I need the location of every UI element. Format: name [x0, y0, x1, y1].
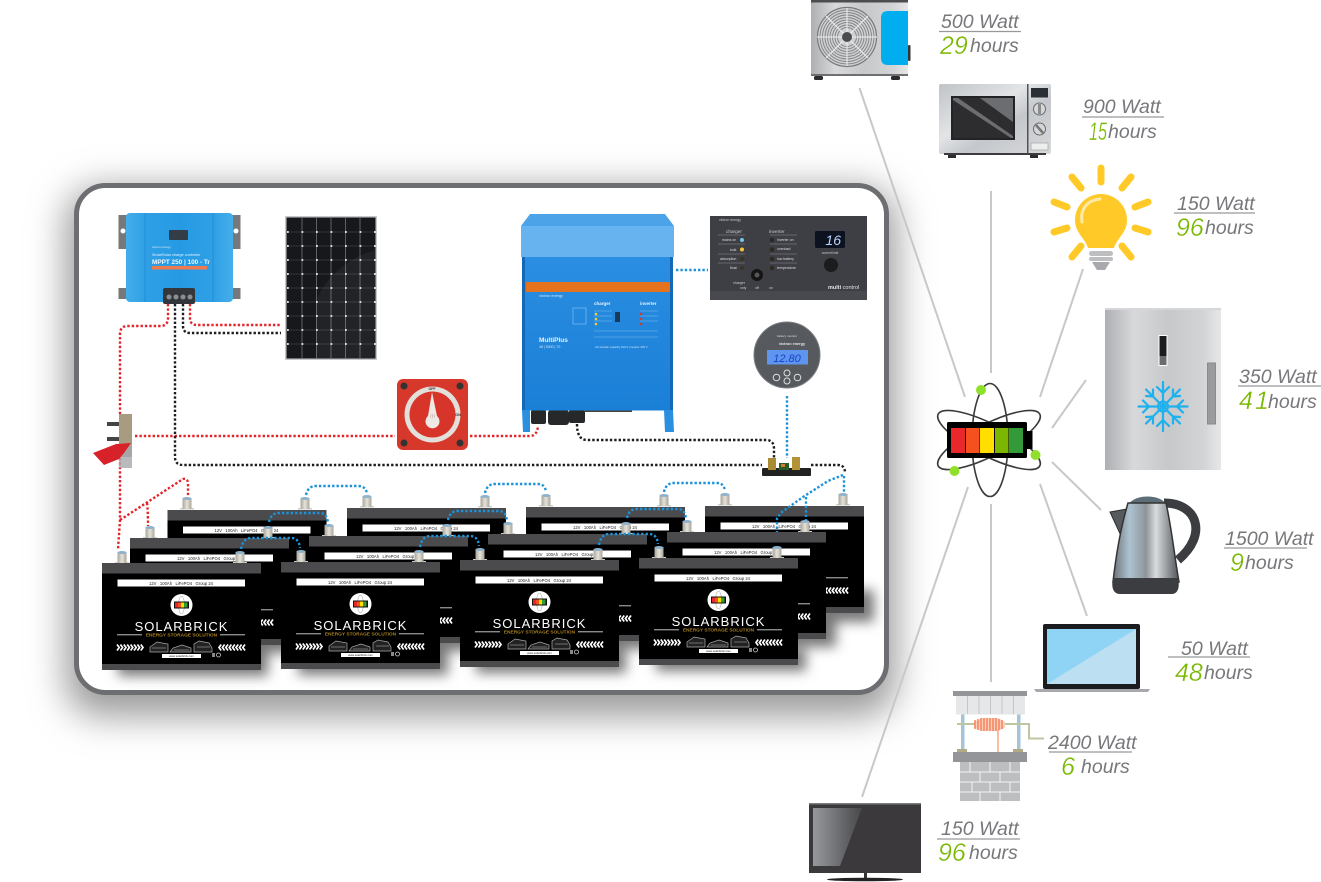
icon: multi control panel: absorption [720, 257, 736, 261]
battery: middle 2: 12V 100Ah LiFePO4 Group 24 [356, 554, 421, 559]
label: heat pump runtime: 29 [939, 32, 968, 60]
battery: middle 2 [309, 536, 468, 643]
label: microwave runtime: hours [1108, 121, 1157, 143]
battery: front 1: 12V 100Ah LiFePO4 Group 24 [149, 581, 214, 586]
icon: multi control panel: charger [726, 229, 742, 234]
label: microwave runtime: 15 [1089, 118, 1107, 146]
battery: front 3: www.solarbrick.com [527, 651, 553, 655]
icon: microwave [939, 84, 1051, 158]
panel: system wiring diagram [66, 186, 896, 716]
icon: MPPT solar charge controller: SmartSolar charge controller [152, 253, 201, 257]
wires: front row links [241, 534, 658, 549]
label: light bulb runtime: 150 Watt [1177, 193, 1256, 215]
battery: middle 4 [667, 532, 826, 639]
label: laptop runtime: hours [1204, 662, 1253, 684]
battery: front 2: ENERGY STORAGE SOLUTION [325, 632, 397, 638]
battery shadow [118, 590, 874, 676]
wires: middle row links [269, 509, 686, 523]
batteries: front row [102, 546, 798, 670]
icon: refrigerator [1105, 308, 1221, 470]
icon: electric kettle [1110, 496, 1196, 594]
label: water well pump runtime: 2400 Watt [1047, 732, 1138, 754]
battery: front 3: ENERGY STORAGE SOLUTION [504, 630, 576, 636]
label: light bulb runtime [1174, 193, 1256, 242]
battery: front 3: 12V 100Ah LiFePO4 Group 24 [507, 578, 572, 583]
battery: middle 1 [130, 538, 289, 645]
icon: MultiPlus inverter charger: AC transfer capacity 100 A | inverter 230 V [595, 345, 648, 349]
icon: MultiPlus inverter charger: 48 | 5000 | 70 [539, 345, 560, 349]
connector lines: hub to appliances [860, 88, 1101, 797]
icon: multi control panel: bulk [730, 248, 737, 252]
battery: front 2 [281, 562, 440, 669]
icon: battery monitor: victron energy [779, 342, 806, 346]
battery: front 4: ENERGY STORAGE SOLUTION [683, 628, 755, 634]
label: refrigerator runtime: 4 [1239, 387, 1253, 415]
label: television runtime [937, 818, 1020, 867]
icon: multi control panel: mains on [722, 238, 736, 242]
label: television runtime: 150 Watt [941, 818, 1020, 840]
icon: heat pump [811, 0, 910, 80]
icon: multi control panel: 16 [825, 232, 841, 248]
battery: back 4 [705, 506, 864, 613]
label: refrigerator runtime: hours [1268, 391, 1317, 413]
wires: blue data cables [676, 270, 787, 458]
icon: MultiPlus inverter charger: inverter [640, 301, 657, 306]
icon: television [809, 803, 921, 881]
battery: middle 1: 12V 100Ah LiFePO4 Group 24 [177, 556, 242, 561]
icon: MultiPlus inverter charger: charger [594, 301, 611, 306]
battery: front 1: www.solarbrick.com [169, 654, 195, 658]
batteries: middle row [130, 520, 826, 645]
wires: back row links and shunt links [306, 475, 844, 533]
label: light bulb runtime: hours [1205, 217, 1254, 239]
icon: MultiPlus inverter charger: MultiPlus [539, 337, 568, 344]
battery: front 1: ENERGY STORAGE SOLUTION [146, 632, 218, 638]
icon: multi control panel: temperature [777, 266, 796, 270]
icon: snowflake [1138, 382, 1188, 431]
label: kettle runtime: 1500 Watt [1225, 528, 1315, 550]
label: microwave runtime [1082, 96, 1164, 146]
batteries: back row [168, 493, 864, 617]
icon: multi control panel: multi control [828, 285, 859, 291]
icon: multi control panel [710, 216, 867, 300]
icon: battery isolator switch: m [430, 414, 435, 420]
label: refrigerator runtime: 1 [1255, 387, 1269, 415]
label: light bulb runtime: 96 [1176, 214, 1204, 242]
battery: middle 3: 12V 100Ah LiFePO4 Group 24 [535, 552, 600, 557]
icon: multi control panel: victron energy [719, 218, 741, 222]
battery: back 1 [168, 510, 326, 617]
icon: MPPT solar charge controller: victron energy [152, 245, 171, 249]
icon: multi control panel: on [769, 286, 773, 290]
icon: multi control panel: current limit [822, 251, 838, 255]
icon: solar panel [285, 216, 377, 360]
icon: battery monitor: battery monitor [777, 334, 797, 338]
label: laptop runtime: 50 Watt [1181, 638, 1249, 660]
label: microwave runtime: 900 Watt [1083, 96, 1162, 118]
label: kettle runtime: 9 [1230, 549, 1244, 577]
label: water well pump runtime [1047, 732, 1138, 781]
icon: battery isolator switch [397, 379, 468, 450]
label: laptop runtime [1168, 638, 1253, 687]
icon: battery isolator switch: ON [455, 413, 461, 417]
battery: back 3 [526, 507, 685, 614]
icon: water well [953, 691, 1044, 801]
icon: multi control panel: inverter [769, 229, 785, 234]
label: water well pump runtime: 6 [1061, 753, 1075, 781]
battery: middle 3 [488, 534, 647, 641]
battery: front 4 [639, 558, 798, 665]
battery: back 2: 12V 100Ah LiFePO4 Group 24 [394, 526, 459, 531]
label: laptop runtime: 48 [1175, 659, 1203, 687]
icon: multi control panel: charger [733, 281, 746, 285]
label: television runtime: 96 [938, 839, 966, 867]
icon: light bulb [1054, 168, 1148, 270]
icon: battery isolator switch: OFF [428, 387, 436, 391]
wires: black negative cables [175, 304, 845, 473]
label: heat pump runtime: hours [970, 35, 1019, 57]
battery: front 4: SOLARBRICK [672, 614, 765, 629]
battery: back 1: 12V 100Ah LiFePO4 Group 24 [214, 528, 279, 533]
battery: front 2: www.solarbrick.com [348, 653, 374, 657]
battery: front 4: 12V 100Ah LiFePO4 Group 24 [686, 576, 751, 581]
label: heat pump runtime: 500 Watt [941, 11, 1020, 33]
battery: back 4: 12V 100Ah LiFePO4 Group 24 [752, 524, 817, 529]
battery: back 2 [347, 508, 506, 615]
label: heat pump runtime [939, 11, 1021, 60]
label: water well pump runtime: hours [1081, 756, 1130, 778]
battery: back 3: 12V 100Ah LiFePO4 Group 24 [573, 525, 638, 530]
label: kettle runtime [1224, 528, 1315, 577]
battery: front 3 [460, 560, 619, 667]
icon: battery monitor: 12.80 [773, 353, 802, 365]
icon: battery monitor [754, 322, 820, 388]
icon: multi control panel: overload [777, 247, 790, 251]
icon: MPPT solar charge controller: MPPT 250 | 100 - Tr [152, 259, 210, 266]
wires: red positive cables [118, 304, 538, 549]
icon: multi control panel: inverter on [777, 238, 794, 242]
battery: front 1: SOLARBRICK [135, 619, 228, 634]
label: television runtime: hours [969, 842, 1018, 864]
icon: MultiPlus inverter charger: victron energy [539, 294, 563, 298]
icon: multi control panel: low battery [777, 257, 794, 261]
icon: battery shunt [762, 457, 811, 476]
icon: multi control panel: float [730, 266, 737, 270]
icon: MPPT solar charge controller [118, 213, 240, 304]
battery: middle 4: 12V 100Ah LiFePO4 Group 24 [714, 550, 779, 555]
icon: MultiPlus inverter charger [521, 214, 674, 432]
label: refrigerator runtime [1238, 366, 1321, 415]
icon: battery atom hub [931, 384, 1047, 496]
battery: front 2: SOLARBRICK [314, 618, 407, 633]
icon: multi control panel: only [740, 286, 747, 290]
battery: front 4: www.solarbrick.com [706, 649, 732, 653]
label: refrigerator runtime: 350 Watt [1239, 366, 1318, 388]
icon: DC fuse holder [93, 414, 132, 468]
icon: multi control panel: off [755, 286, 759, 290]
icon: laptop [1034, 624, 1150, 692]
battery: front 3: SOLARBRICK [493, 616, 586, 631]
battery: front 1 [102, 563, 261, 670]
battery: front 2: 12V 100Ah LiFePO4 Group 24 [328, 580, 393, 585]
label: kettle runtime: hours [1245, 552, 1294, 574]
